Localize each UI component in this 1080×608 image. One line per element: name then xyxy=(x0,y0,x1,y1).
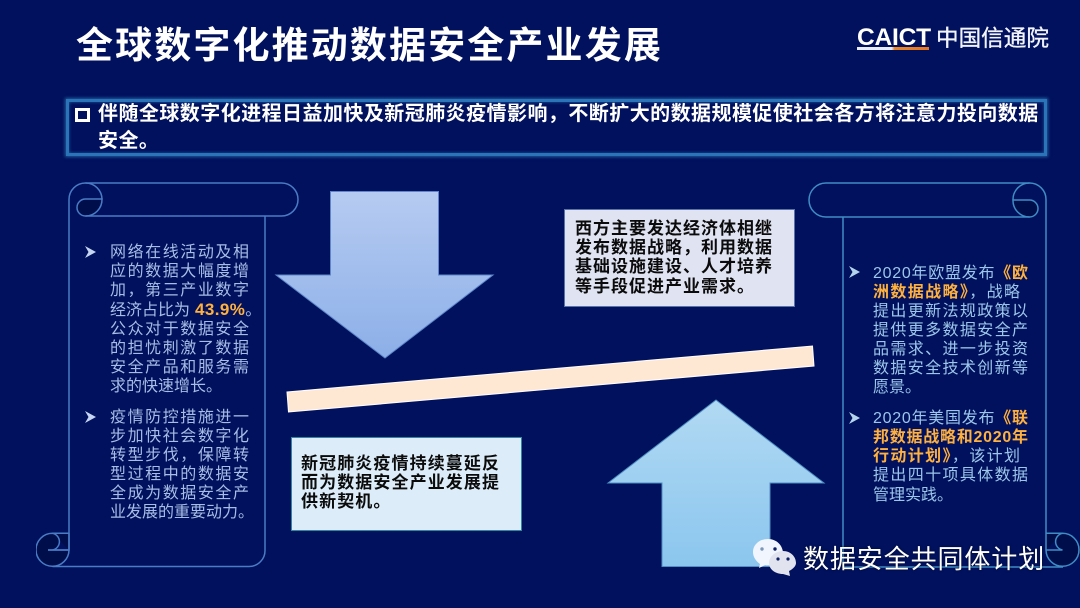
text: online activity: 公众对于数据安全 xyxy=(110,321,251,338)
text: online activity: 应的数据大幅度增 xyxy=(110,263,251,280)
panel: left scroll xyxy=(36,182,299,568)
banner text: 伴随全球数字化进程日益加快及新冠肺炎疫情影响，不断扩大的数据规模促使社会各方将注意力投向数据 xyxy=(98,103,1039,125)
icon: wechat bubbles xyxy=(753,539,796,576)
text: epidemic control: 业发展的重要动力。 xyxy=(110,504,254,521)
callout text: 等手段促进产业需求。 xyxy=(575,277,755,296)
logo: CAICT: CAICT xyxy=(857,24,931,51)
panel: right scroll xyxy=(808,182,1080,568)
text: online activity: 加，第三产业数字 xyxy=(110,282,251,299)
text: online activity: 安全产品和服务需 xyxy=(110,359,251,376)
watermark: wechat xyxy=(753,539,1045,576)
banner: key message xyxy=(66,99,1047,156)
callout: epidemic opportunity xyxy=(291,437,522,531)
arrow: up xyxy=(606,400,826,567)
text: epidemic control xyxy=(110,408,254,521)
logo: CAICT: 中国信通院 xyxy=(936,26,1049,51)
callout text: 供新契机。 xyxy=(301,492,392,511)
bullet icon xyxy=(849,412,860,424)
scroll outline left xyxy=(36,182,299,568)
bullet icon xyxy=(849,266,860,278)
text: online activity xyxy=(110,243,261,395)
arrow: down xyxy=(274,191,494,358)
callout text: 而为数据安全产业发展提 xyxy=(301,473,500,492)
callout text: 基础设施建设、人才培养 xyxy=(575,257,773,276)
text: EU data strategy: 数据安全技术创新等 xyxy=(873,360,1029,377)
watermark text: 数据安全共同体计划 xyxy=(803,544,1045,574)
bullet icon xyxy=(85,246,96,258)
seesaw plank xyxy=(286,346,814,412)
text: online activity: 经济占比为 43.9%。 xyxy=(110,300,261,319)
text: EU data strategy: 愿景。 xyxy=(873,379,921,396)
callout text xyxy=(301,454,500,511)
text: online activity: 求的快速增长。 xyxy=(110,378,222,395)
callout text: 发布数据战略，利用数据 xyxy=(575,238,773,257)
text: EU data strategy: 品需求、进一步投资 xyxy=(873,341,1029,358)
text: US data strategy: 行动计划》，该计划 xyxy=(873,448,1021,465)
banner text: 安全。 xyxy=(98,130,159,152)
logo: CAICT xyxy=(857,24,1049,51)
text: EU data strategy: 洲数据战略》，战略 xyxy=(873,284,1021,301)
banner text xyxy=(98,102,1039,152)
text: US data strategy xyxy=(873,409,1029,504)
callout: western economies xyxy=(564,209,795,307)
text: US data strategy: 2020年美国发布《联 xyxy=(873,410,1029,426)
text: EU data strategy: 提供更多数据安全产 xyxy=(873,322,1029,339)
callout text: 新冠肺炎疫情持续蔓延反 xyxy=(301,454,500,472)
text: US data strategy: 提出四十项具体数据 xyxy=(873,467,1029,484)
text: epidemic control: 步加快社会数字化 xyxy=(110,428,251,445)
text: epidemic control: 全成为数据安全产 xyxy=(110,485,251,502)
text: EU data strategy: 提出更新法规政策以 xyxy=(873,303,1029,320)
text: epidemic control: 型过程中的数据安 xyxy=(110,466,251,483)
callout text: 西方主要发达经济体相继 xyxy=(575,218,773,238)
text: EU data strategy: 2020年欧盟发布《欧 xyxy=(873,264,1029,282)
scroll outline right xyxy=(808,182,1080,568)
text: online activity: 网络在线活动及相 xyxy=(110,244,251,261)
text: epidemic control: 转型步伐，保障转 xyxy=(110,447,251,464)
callout text xyxy=(575,218,773,296)
text: US data strategy: 邦数据战略和2020年 xyxy=(873,429,1029,446)
text: epidemic control: 疫情防控措施进一 xyxy=(110,409,251,426)
text: US data strategy: 管理实践。 xyxy=(873,486,953,504)
text: online activity: 的担忧刺激了数据 xyxy=(110,340,251,357)
text: EU data strategy xyxy=(873,264,1029,396)
bullet icon xyxy=(85,411,96,423)
title: 全球数字化推动数据安全产业发展 xyxy=(76,25,663,66)
icon: hollow square bullet xyxy=(75,108,90,122)
